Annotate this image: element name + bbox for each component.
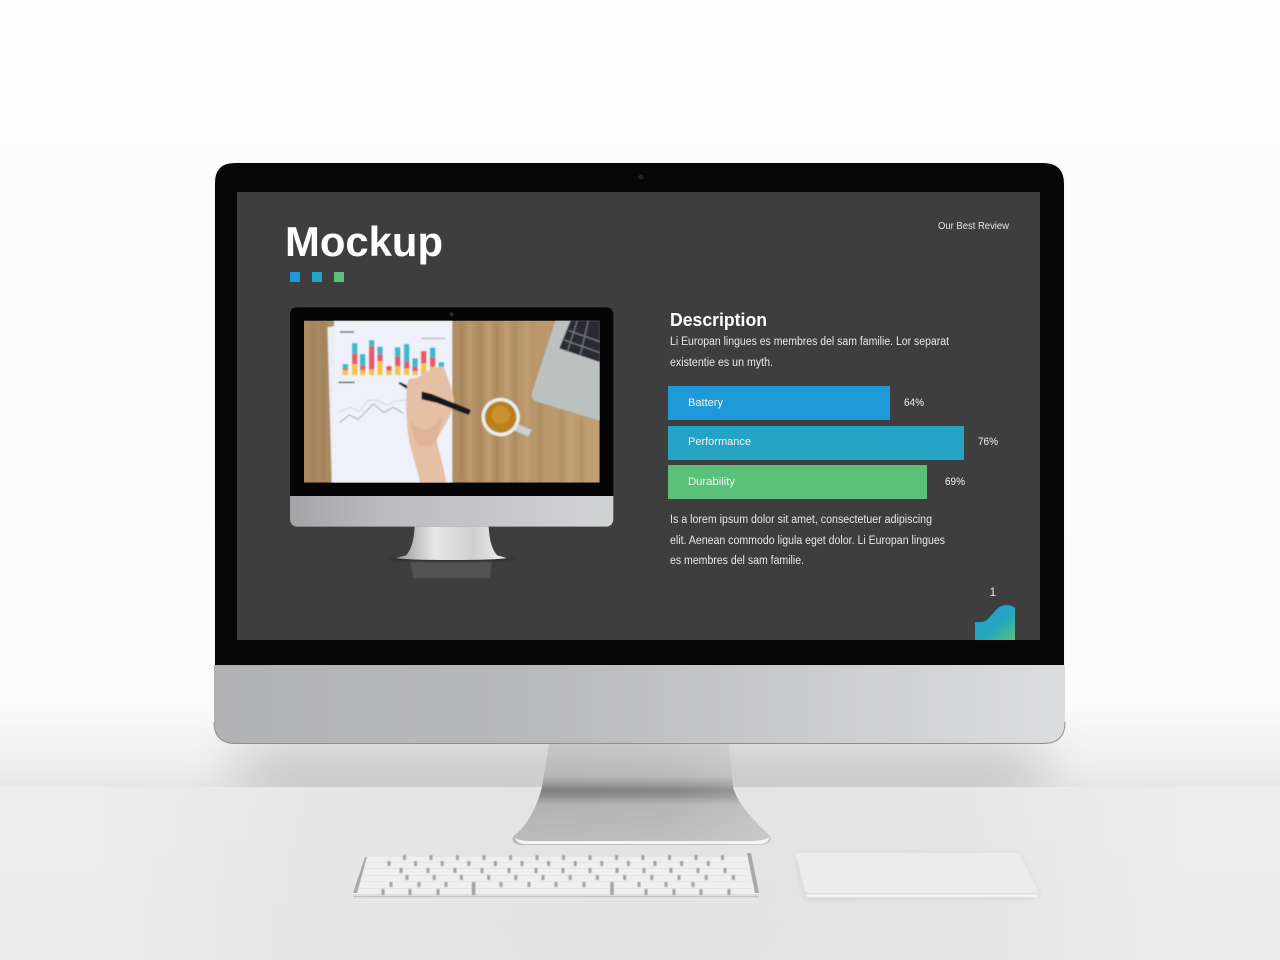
bar: Performance 76%: 76% <box>978 436 998 448</box>
header label: Our Best Review <box>938 220 1009 232</box>
small monitor mockup <box>290 307 613 578</box>
report bar chart <box>343 340 444 375</box>
bar: Durability 69%: Durability <box>688 476 736 488</box>
description text: Li Europan lingues es membres del sam familie. Lor separat <box>670 336 950 348</box>
keyboard key gaps <box>383 855 733 895</box>
description text: existentie es un myth. <box>670 357 773 369</box>
keyboard <box>353 853 759 900</box>
monitor stand <box>512 744 771 845</box>
closing paragraph: es membres del sam familie. <box>670 555 804 567</box>
laptop <box>532 321 600 421</box>
small monitor bezel <box>290 307 613 496</box>
trackpad <box>796 853 1038 898</box>
report line chart <box>339 400 408 423</box>
coffee cup <box>481 398 532 437</box>
bar chart <box>668 386 998 499</box>
slide panel <box>237 192 1040 640</box>
section heading: Description: Description <box>670 310 767 330</box>
background: wall and desk <box>0 719 1280 960</box>
bar: Performance 76% <box>668 426 998 460</box>
description text <box>670 336 950 369</box>
small monitor reflection <box>410 562 492 578</box>
large monitor body <box>214 162 1066 744</box>
bar: Battery 64%: Battery <box>688 397 723 409</box>
bar: Durability 69%: 69% <box>945 476 965 488</box>
page number: 1 <box>990 585 996 599</box>
closing paragraph: Is a lorem ipsum dolor sit amet, consectetuer adipiscing <box>670 514 932 526</box>
corner wave decoration <box>975 605 1015 640</box>
bar: Battery 64%: 64% <box>904 397 924 409</box>
small monitor chin <box>290 496 613 527</box>
small monitor stand <box>388 527 515 561</box>
bar: Performance 76%: Performance <box>688 436 751 448</box>
bar: Battery 64% <box>668 386 924 420</box>
hand and pen <box>398 367 471 483</box>
bar: Durability 69% <box>668 465 965 499</box>
closing paragraph <box>670 514 945 567</box>
report headings <box>339 331 445 383</box>
closing paragraph: elit. Aenean commodo ligula eget dolor. Li Europan lingues <box>670 535 945 547</box>
title accent squares <box>290 272 344 282</box>
title: Mockup <box>285 218 443 265</box>
photo: desk with report, hand, coffee and laptop <box>304 321 600 483</box>
